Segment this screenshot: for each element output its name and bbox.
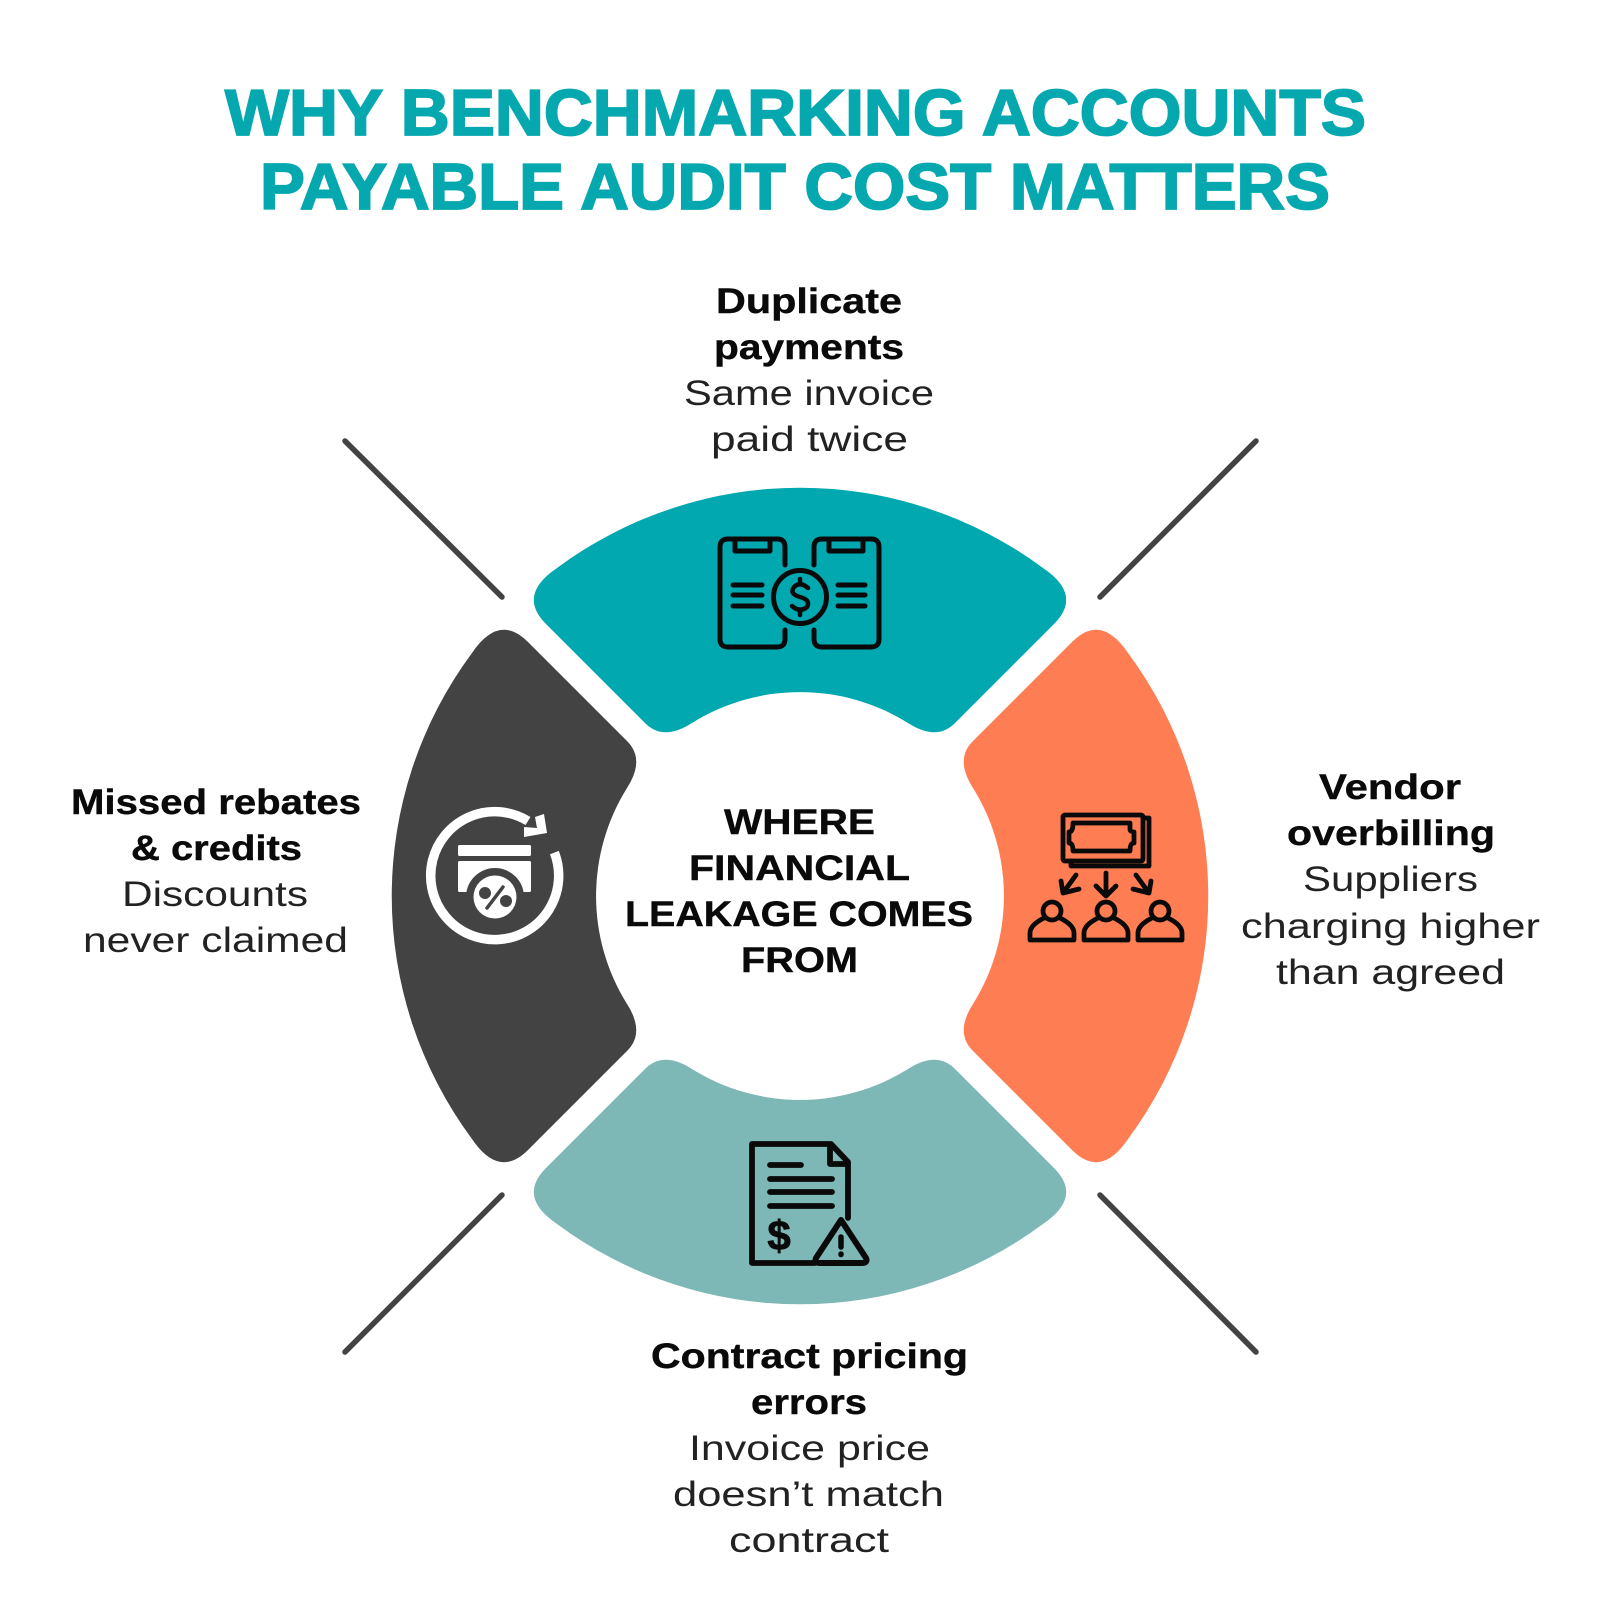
icon: invoice document with warning triangle: $ [767,1212,791,1259]
decorative diagonal: top left [345,441,502,597]
text: vendor overbilling [1241,768,1540,992]
center label [625,803,973,980]
text: vendor overbilling: charging higher [1241,907,1540,946]
text: duplicate payments [684,282,934,459]
decorative diagonal: bottom left [345,1195,502,1352]
text: duplicate payments: Duplicate [716,282,902,321]
text: vendor overbilling: overbilling [1287,814,1495,853]
wheel segment: contract pricing errors [534,1060,1066,1304]
text: duplicate payments: Same invoice [684,374,934,413]
icon: invoice document with warning triangle [752,1144,866,1263]
text: contract pricing errors: contract [729,1521,889,1560]
text: missed rebates and credits: never claimed [83,921,348,960]
text: missed rebates and credits: & credits [131,829,302,868]
text: contract pricing errors: errors [751,1383,867,1422]
wheel segment: vendor overbilling [964,630,1208,1162]
wheel segment: missed rebates [392,630,636,1162]
text: vendor overbilling: Vendor [1319,768,1461,807]
wheel segment: duplicate payments [534,488,1066,732]
center label: FINANCIAL [689,849,910,888]
center label: FROM [741,941,858,980]
text: missed rebates and credits: Missed rebates [71,783,361,822]
text: duplicate payments: payments [714,328,904,367]
text: vendor overbilling: than agreed [1276,953,1505,992]
text: missed rebates and credits: Discounts [122,875,308,914]
decorative diagonal: top right [1100,441,1256,597]
icon: two phones with dollar coin [720,539,879,647]
text: contract pricing errors: doesn’t match [673,1475,944,1514]
text: contract pricing errors: Invoice price [689,1429,930,1468]
center label: WHERE [724,803,875,842]
text: vendor overbilling: Suppliers [1303,860,1478,899]
title [225,76,1366,223]
text: missed rebates and credits [71,783,361,960]
icon: money flowing to three people [1030,815,1182,940]
decorative diagonal: bottom right [1100,1195,1256,1352]
icon: discount card with refresh arrow [431,812,559,940]
center label: LEAKAGE COMES [625,895,973,934]
text: contract pricing errors: Contract pricing [651,1337,968,1376]
text: duplicate payments: paid twice [711,420,908,459]
text: contract pricing errors [651,1337,968,1560]
title: WHY BENCHMARKING ACCOUNTS [225,76,1366,149]
title: PAYABLE AUDIT COST MATTERS [260,150,1330,223]
